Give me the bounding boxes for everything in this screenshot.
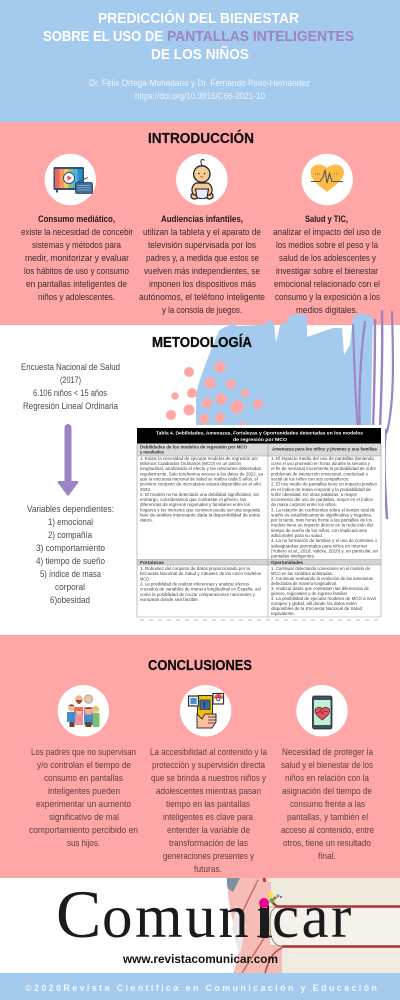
table: SWOT: MCO. <box>140 576 150 581</box>
table: SWOT: sufrir obesidad. En otras palabras, a mayor <box>271 492 358 497</box>
text: dependent variables: 1) emocional <box>48 517 93 527</box>
text: conclusion access: que se brinda a nuestros niños y <box>151 773 266 783</box>
text: conclusion health: asignación del tiempo de <box>282 786 372 796</box>
text: conclusion health <box>281 747 374 861</box>
icon: baby <box>176 154 228 205</box>
panel: header <box>0 0 400 122</box>
table: SWOT: 2. El uso medio de pantallas tiene un impacto positivo <box>271 482 378 487</box>
footer: ©2020Revista Científica en Comunicación y Educación <box>25 983 377 993</box>
text: consumo mediático: existe la necesidad de concebir <box>21 227 133 237</box>
logo: Comunicar: i <box>256 884 273 951</box>
table: SWOT: sueño es estadísticamente significativa y negativa, <box>271 512 372 518</box>
text: consumo mediático <box>21 214 133 302</box>
text: conclusion access: tiempo en las pantallas <box>166 799 250 809</box>
panel: logo with books <box>56 876 400 973</box>
table: SWOT: y resultados <box>140 450 165 455</box>
text: survey data: Regresión Lineal Ordinaria <box>23 401 119 411</box>
heading: introducción: INTRODUCCIÓN <box>148 129 254 147</box>
table: SWOT: salvaguardas parentales para niños en Internet <box>271 543 368 548</box>
table: SWOT: 3. La relación de coeficientes sobre el tiempo total de <box>271 507 376 512</box>
text: conclusion access: transformación de las <box>169 838 248 848</box>
text: audiencias infantiles: autónomos, el teléfono inteligente <box>139 292 265 302</box>
photo: stack of books <box>227 878 400 973</box>
pink dots <box>166 362 263 428</box>
text: conclusion health: salud y el bienestar de los <box>281 760 373 770</box>
table: SWOT: Debilidades de los modelos de regresión por MCO <box>140 445 248 450</box>
text: survey data: (2017) <box>60 375 81 385</box>
table: SWOT: Tabla 4. Debilidades, Amenazas, Fortalezas y Oportunidades detectadas en los modelos <box>156 430 364 436</box>
table: SWOT: Mínimos Cuadrados Ordinarios (MCO) en un patrón <box>140 461 242 466</box>
text: conclusion access <box>150 747 268 874</box>
table: SWOT: adicionales para su salud. <box>271 533 323 538</box>
text: conclusion parents: consumo en pantallas <box>44 773 123 783</box>
title: PANTALLAS INTELIGENTES <box>167 29 354 45</box>
authors and doi <box>89 78 310 101</box>
table: SWOT: europeo y global, allí donde los datos estén <box>271 601 358 606</box>
table: SWOT: social de los niños con sus compañeros. <box>271 476 349 482</box>
table: SWOT: incremento del uso de pantallas, mayor es el índice <box>271 497 374 502</box>
table: SWOT: medios tiene un impacto directo en la reducción del <box>271 523 373 528</box>
panel: introducción <box>0 122 400 325</box>
table: SWOT: problemas de interacción emocional, conductual o <box>271 471 369 476</box>
table: SWOT: de masa corporal entre los niños. <box>271 502 337 507</box>
text: salud y tic: consumo y la exposición a los <box>275 292 380 302</box>
text: consumo mediático: los hábitos de uso y consumo <box>24 266 129 276</box>
text: audiencias infantiles: vuelven más independientes, se <box>144 266 260 276</box>
table: SWOT: regularmente. Solo tendremos acceso a los datos de 2022, ya <box>140 471 264 476</box>
text: conclusion parents: Los padres que no supervisan <box>31 747 136 757</box>
icon: phone with heart <box>296 685 348 736</box>
text: dependent variables: 6)obesidad <box>50 595 90 605</box>
website url: www.revistacomunicar.com <box>122 954 278 966</box>
table: SWOT: Amenazas para los niños y jóvenes y sus familias <box>272 447 378 452</box>
text: consumo mediático: en pantallas inteligentes de <box>26 279 127 289</box>
table: SWOT: 2. La posibilidad de realizar inferencias y analizar efectos <box>140 582 249 586</box>
table: SWOT: 4. La no formación de familias y el uso de controles o <box>271 538 378 543</box>
text: salud y tic <box>273 214 381 315</box>
table: SWOT: en el índice de masa corporal y la probabilidad de <box>271 487 372 492</box>
text: conclusion access: La accesibilidad al contenido y la <box>150 747 268 757</box>
text: conclusion access: protección y supervisión directa <box>152 760 266 770</box>
table: SWOT: tiempo de sueño de los niños, con implicaciones <box>271 528 367 533</box>
text: conclusion access: adolescentes mientras pasan <box>156 786 261 796</box>
text: conclusion access: entender la variable de <box>167 825 250 835</box>
table: SWOT: 2023. <box>140 487 151 492</box>
table: SWOT: datos. <box>140 518 153 523</box>
text: survey data: Encuesta Nacional de Salud <box>21 362 120 372</box>
text: dependent variables: 5) índice de masa <box>40 569 102 579</box>
logo: Comunicar: C <box>56 876 101 952</box>
table: SWOT: diferencias de ingresos regionales y familiares entre los <box>140 502 250 507</box>
panel: conclusiones <box>0 635 400 878</box>
icon: social media phone: f <box>203 701 206 710</box>
footer <box>0 973 400 1000</box>
text: consumo mediático: medir, monitorizar y evaluar <box>25 253 129 263</box>
heading: metodología: METODOLOGÍA <box>152 334 252 351</box>
panel: metodología <box>21 311 393 622</box>
heading: conclusiones: CONCLUSIONES <box>148 658 252 674</box>
text: consumo mediático: sistemas y métodos para <box>32 240 122 250</box>
text: survey data <box>21 362 120 411</box>
text: conclusion access: generaciones presentes y <box>163 851 254 861</box>
table: SWOT: 1. Robustez del conjunto de datos proporcionado por la <box>140 566 251 571</box>
text: dependent variables: 4) tiempo de sueño <box>36 556 105 566</box>
logo: Comunicar <box>56 876 354 952</box>
table: SWOT: el fin de semana) incrementa la probabilidad de sufrir <box>271 466 377 471</box>
arrow <box>58 424 78 496</box>
icon: heart with pulse <box>302 154 353 205</box>
table: SWOT: fase de análisis interesante dada la disponibilidad de estos <box>140 512 260 518</box>
table: SWOT <box>135 425 385 622</box>
table: SWOT: por lo tanto, más horas frente a las pantallas de los <box>271 518 372 523</box>
text: conclusion parents: y/o controlan el tiempo de <box>37 760 131 770</box>
text: dependent variables: 3) comportamiento <box>36 543 105 553</box>
table: SWOT: como la posibilidad de cruzar comparaciones nacionales y <box>140 592 256 597</box>
authors and doi: https://doi.org/10.3916/C66-2021-10 <box>135 91 265 101</box>
title: SOBRE EL USO DE <box>43 29 163 45</box>
text: conclusion parents: inteligentes pueden <box>48 786 120 796</box>
table: SWOT: hogares y los menores que conviven puede ser una segunda <box>140 507 261 512</box>
text: conclusion access: inteligentes es clave para <box>163 812 254 822</box>
blue paint splash <box>196 314 373 426</box>
text: conclusion health: niños en relación con la <box>285 773 370 783</box>
table: SWOT: pantallas inteligentes. <box>271 554 315 558</box>
text: dependent variables <box>27 504 114 605</box>
title <box>43 9 354 63</box>
text: salud y tic: medios digitales. <box>296 305 358 315</box>
table: SWOT: 2. El modelo no ha detectado una debilidad significativa; sin <box>140 492 260 497</box>
table: SWOT: 1. El impacto medio del uso de pantallas (teniendo <box>271 456 375 461</box>
text: conclusion parents <box>29 747 138 848</box>
table: SWOT: Oportunidades <box>271 560 304 565</box>
text: audiencias infantiles: imponen los dispositivos más <box>149 279 256 289</box>
table: SWOT: Encuesta Nacional de Salud y robustez de los cinco modelos <box>140 571 261 576</box>
text: audiencias infantiles: televisión supervisada por los <box>148 240 256 250</box>
text: salud y tic: salud de los adolescentes y <box>279 253 376 263</box>
text: consumo mediático: Consumo mediático, <box>38 214 115 224</box>
text: salud y tic: Salud y TIC, <box>305 214 348 224</box>
icon: tv and radio <box>45 154 96 205</box>
text: audiencias infantiles <box>139 214 265 315</box>
icon: family <box>58 685 109 736</box>
text: conclusion parents: experimentar un aumento <box>36 799 131 809</box>
table: SWOT: equivalente. <box>271 611 295 616</box>
text: conclusion health: consumo frente a las <box>290 799 365 809</box>
text: conclusion health: pantallas, y también el <box>287 812 368 822</box>
table: SWOT: cruzados de variables de manera longitudinal en España, así <box>140 587 262 592</box>
logo: Comunicar: omun <box>102 884 251 951</box>
text: conclusion health: Necesidad de proteger la <box>282 747 374 757</box>
table: SWOT: Fortalezas <box>140 560 165 565</box>
table: SWOT: como el uso promedio en horas durante la semana y <box>271 461 371 466</box>
table: SWOT: de regresión por MCO <box>233 437 288 442</box>
table: SWOT: 1. Existe la necesidad de ejecutar modelos de regresión por <box>140 456 259 461</box>
text: consumo mediático: niños y adolescentes. <box>38 292 115 302</box>
table: SWOT: embargo, consideramos que contrastar el género, las <box>140 497 246 502</box>
text: conclusion health: acceso al contenido, entre <box>281 825 374 835</box>
table: SWOT: disponibles de la Encuesta Nacional de Salud <box>271 606 363 611</box>
text: dependent variables: corporal <box>55 582 85 592</box>
title: PREDICCIÓN DEL BIENESTAR <box>98 9 299 27</box>
table: SWOT: género, regionales y de ingreso familiar. <box>271 591 348 596</box>
table: SWOT: MCO en las variables analizadas. <box>271 571 333 576</box>
table: SWOT: que la encuesta nacional de salud se realiza cada 5 años, el <box>140 476 258 482</box>
table: SWOT: 2. Continuar evaluando la evolución de las amenazas <box>271 576 373 581</box>
table: SWOT: longitudinal, analizando el efecto y las relaciones detectadas <box>140 466 261 471</box>
authors and doi: Dr. Félix Ortega-Mohedano y Dr. Fernando Pinto-Hernández <box>89 78 310 88</box>
table: SWOT: (Yubero et al., 2018; Valcke, 2010) y, en particular, en <box>271 548 379 553</box>
text: conclusion parents: sus hijos. <box>67 838 100 848</box>
table: SWOT: 3. Analizar datos que contrasten las diferencias de <box>271 586 370 591</box>
table: SWOT: 1. Continuar detectando conexiones en el modelo de <box>271 566 371 571</box>
text: conclusion health: final. <box>318 851 336 861</box>
text: audiencias infantiles: utilizan la tableta y el aparato de <box>143 227 261 237</box>
table: SWOT: detectadas de manera longitudinal. <box>271 581 337 586</box>
text: audiencias infantiles: padres y, a medida que estos se <box>146 253 259 263</box>
text: audiencias infantiles: y la consola de juegos. <box>162 305 242 315</box>
text: survey data: 6.106 niños < 15 años <box>33 388 107 398</box>
text: salud y tic: investigar sobre el bienestar <box>276 266 378 276</box>
title: DE LOS NIÑOS <box>151 45 249 63</box>
table: SWOT: europeas donde sea factible. <box>140 597 199 602</box>
table: SWOT: próximo conjunto de microdatos estará disponible en el año <box>140 482 262 487</box>
text: dependent variables: 2) compañía <box>48 530 93 540</box>
table: SWOT: 4. La posibilidad de ejecutar modelos de MCO a nivel <box>271 596 376 601</box>
logo: Comunicar: car <box>272 884 354 951</box>
text: conclusion parents: comportamiento percibido en <box>29 825 138 835</box>
text: conclusion access: futuras. <box>194 864 222 874</box>
text: salud y tic: emocional relacionado con el <box>274 279 380 289</box>
text: salud y tic: los medios sobre el peso y la <box>276 240 379 250</box>
text: conclusion parents: significativo de mal <box>49 812 119 822</box>
text: audiencias infantiles: Audiencias infantiles, <box>161 214 243 224</box>
icon: social media phone <box>180 685 231 736</box>
text: conclusion health: otros, tiene un resultado <box>283 838 371 848</box>
text: dependent variables: Variables dependientes: <box>27 504 114 514</box>
purple streaks <box>353 311 393 518</box>
text: salud y tic: analizar el impacto del uso de <box>273 227 381 237</box>
